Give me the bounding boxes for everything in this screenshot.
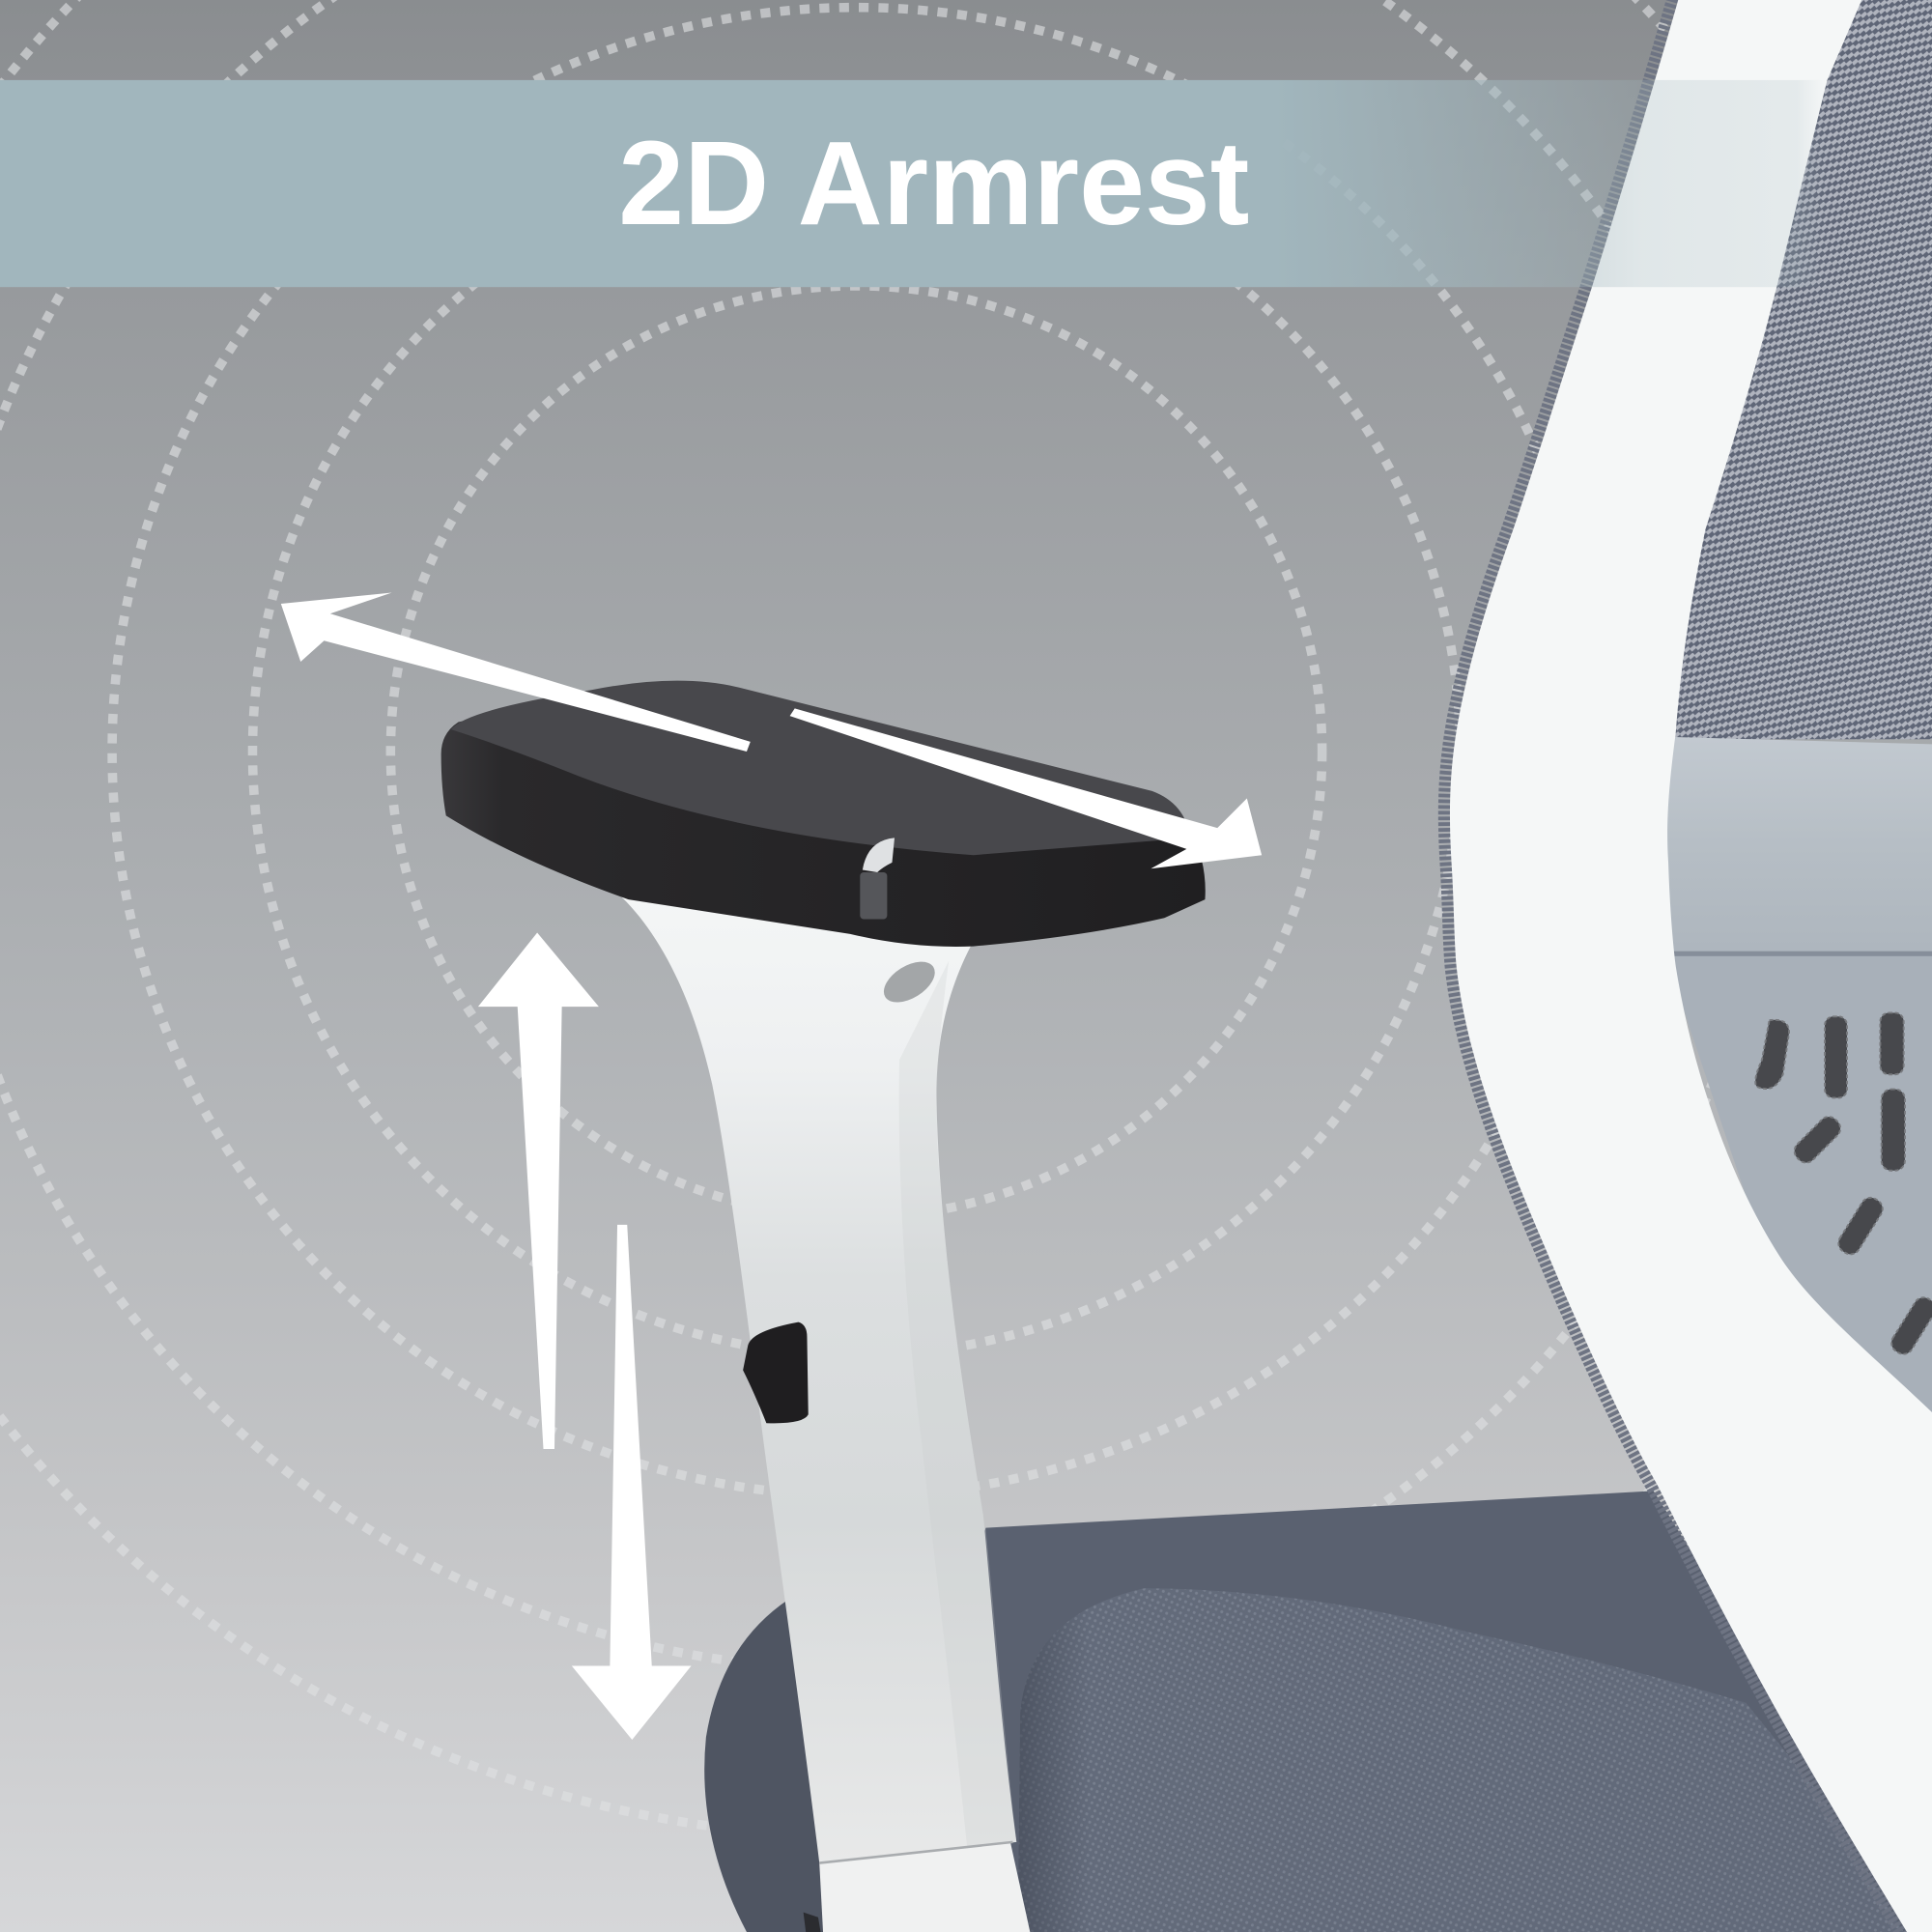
armrest (441, 681, 1206, 1932)
title: 2D Armrest (618, 117, 1249, 250)
chair seat (704, 1491, 1932, 1932)
arrow: left (281, 593, 751, 752)
stitched mesh edge (1450, 0, 1910, 1932)
seat front bulge (704, 1600, 863, 1932)
seat cushion (1018, 1588, 1904, 1932)
arrow: right (790, 708, 1262, 868)
sleeve joint (819, 1842, 1012, 1863)
chair mesh back (1651, 0, 1932, 1454)
mesh panel (1651, 0, 1932, 739)
white frame band (1450, 0, 1932, 1932)
post oval recess (877, 953, 942, 1010)
arrow: up (478, 933, 599, 1449)
pad top surface (451, 681, 1190, 855)
armrest post (613, 890, 1016, 1863)
seat back section (863, 1491, 1932, 1932)
pad highlight (863, 838, 895, 872)
cushion shading (1018, 1588, 1904, 1932)
pad side (441, 693, 1206, 947)
post right facet (899, 961, 1016, 1848)
lumbar bar (1665, 737, 1932, 952)
lumbar bar shadow (1665, 952, 1932, 956)
arrow: down (572, 1225, 692, 1740)
sleeve tag (804, 1913, 820, 1932)
adjustment button (743, 1322, 809, 1423)
pad notch (860, 872, 887, 920)
chair white frame (1450, 0, 1932, 1932)
title banner (0, 80, 1932, 287)
lumbar plate lower (1663, 949, 1932, 1454)
post lower sleeve (819, 1842, 1030, 1932)
lumbar holes (1755, 1012, 1932, 1358)
